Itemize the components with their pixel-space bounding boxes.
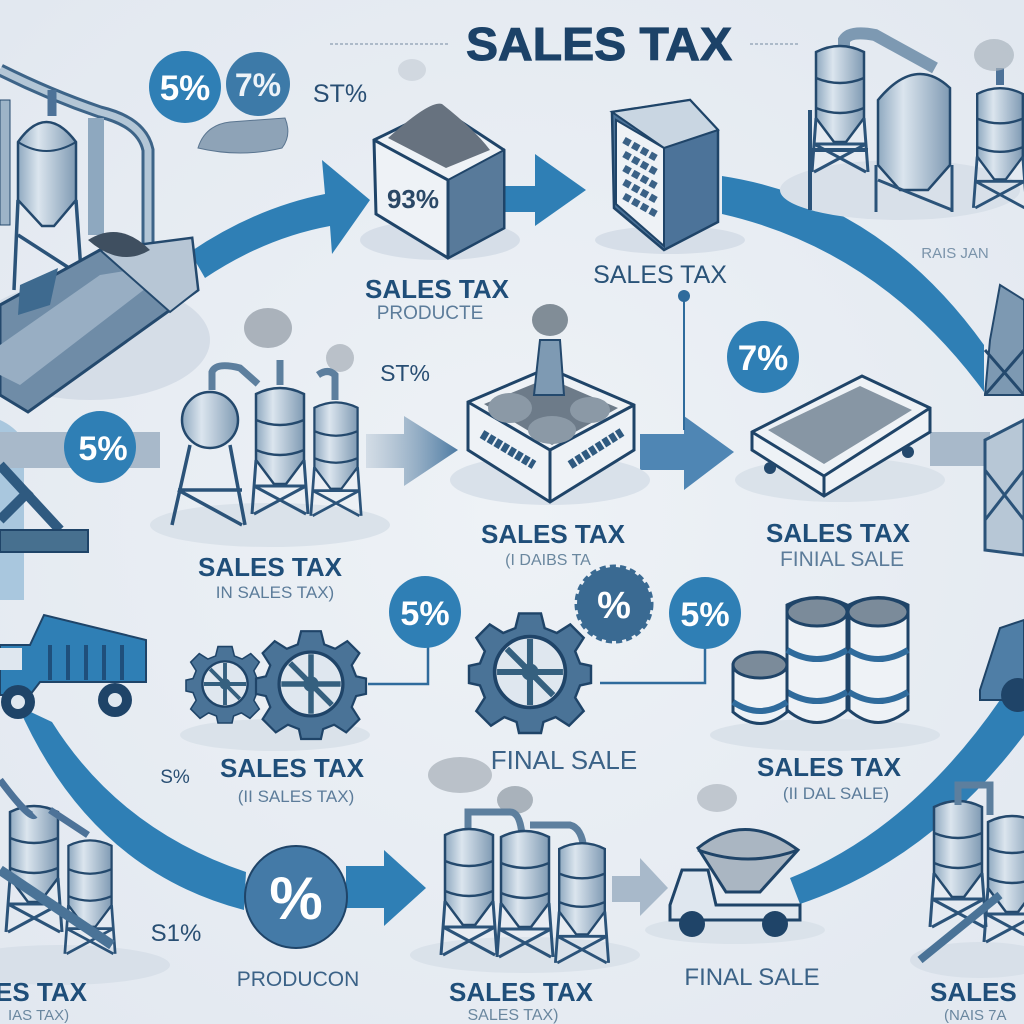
- icon: van right edge: [980, 620, 1024, 712]
- icon: dump truck left: [0, 615, 146, 719]
- arrow: bottom left sweep: [18, 706, 246, 910]
- badge: 7% middle: [727, 321, 799, 393]
- label: sales tax: SALES TAX: [593, 261, 727, 289]
- icon: gear pair: [180, 631, 370, 751]
- label: final sale bottom: FINAL SALE: [684, 964, 820, 991]
- connector: gears to 5%: [368, 640, 428, 684]
- icon: three silos: [410, 757, 640, 973]
- badge: percent: %: [269, 865, 323, 932]
- badge: 5% row 3: [389, 576, 461, 648]
- icon: top right plant: [780, 33, 1024, 220]
- label: sales tax final sale: FINIAL SALE: [780, 548, 904, 571]
- icon: center left plant row 2: [150, 308, 390, 547]
- badge: percent gear: %: [597, 585, 631, 627]
- badge: 5% left: [64, 411, 136, 483]
- icon: bottom right plant: [910, 785, 1024, 978]
- icon: conveyor left: [0, 465, 88, 552]
- label: ST% row 2: ST%: [380, 360, 430, 386]
- arrow: middle row 2: [640, 416, 734, 490]
- badge: 5% row 3 right: [669, 577, 741, 649]
- icon: barrels: [710, 598, 940, 751]
- label: sales tax bottom left: [0, 977, 88, 1024]
- arrow: bottom row 2: [612, 858, 668, 916]
- label: sales tax row 3 right: SALES TAX: [757, 752, 902, 782]
- badge: 7% top: 7%: [235, 67, 281, 103]
- arrow: top middle: [498, 154, 586, 226]
- badge: 5% row 3: 5%: [400, 595, 450, 633]
- icon: hopper truck: [645, 784, 825, 944]
- label: sales tax final sale: [766, 518, 911, 571]
- label: sales tax row 3 right: (II DAL SALE): [783, 784, 889, 803]
- label: sales tax bottom center: [449, 977, 594, 1024]
- label: sales tax center: [481, 519, 626, 569]
- label: sales tax row 3 left: SALES TAX: [220, 753, 365, 783]
- title: SALES TAX: [466, 18, 732, 70]
- badge: 5% top: 5%: [160, 69, 210, 108]
- icon: ore tray: [735, 376, 945, 502]
- label: ST% top: ST%: [313, 80, 367, 108]
- arrow: middle row 1: [366, 416, 458, 486]
- label: sales tax bottom right: (NAIS 7A: [944, 1007, 1007, 1024]
- label: final sale middle: FINAL SALE: [491, 745, 637, 775]
- label: sales tax row 2 left: [198, 552, 343, 602]
- icon: document book: [595, 100, 745, 254]
- icon: tax box: [360, 104, 520, 260]
- badge: percent gear: [577, 567, 651, 641]
- icon: right edge tower: [985, 420, 1024, 555]
- label: sales tax bottom center: SALES TAX): [468, 1007, 558, 1024]
- label: S%: S%: [160, 767, 190, 788]
- arrow: top right sweep: [722, 176, 984, 392]
- label: sales tax product: [365, 274, 510, 324]
- badge: percent: [245, 846, 347, 948]
- arrow: top left sweep: [190, 160, 370, 278]
- label: sales tax center: (I DAIBS TA: [505, 552, 591, 569]
- label: S1%: S1%: [151, 920, 201, 947]
- connector: gear to 5%: [600, 640, 705, 683]
- label: production: PRODUCON: [237, 968, 359, 991]
- label: sales tax row 3 left: (II SALES TAX): [238, 787, 354, 806]
- arrow: bottom row 1: [346, 850, 426, 926]
- icon: coins: [198, 118, 288, 153]
- connector: [678, 290, 690, 430]
- label: sales tax row 2 left: IN SALES TAX): [216, 583, 334, 602]
- badge: 5% left: 5%: [78, 430, 128, 468]
- icon: large gear: [469, 613, 591, 733]
- icon: ore bin with stack: [450, 304, 650, 505]
- label: top right: RAIS JAN: [921, 245, 989, 262]
- arrow: left descending sweep: [0, 420, 24, 600]
- label: sales tax row 3 right: [757, 752, 902, 803]
- label: sales tax bottom left: IAS TAX): [8, 1007, 69, 1024]
- icon: top left plant: [0, 70, 210, 412]
- label: sales tax bottom center: SALES TAX: [449, 977, 594, 1007]
- arrow: middle band left: [0, 432, 160, 468]
- label: sales tax product: PRODUCTE: [377, 303, 483, 324]
- badge: 5% top: [149, 51, 221, 123]
- badge: 7% top: [226, 52, 290, 116]
- label: sales tax row 2 left: SALES TAX: [198, 552, 343, 582]
- label: sales tax product: SALES TAX: [365, 274, 510, 304]
- label: sales tax center: SALES TAX: [481, 519, 626, 549]
- label: sales tax final sale: SALES TAX: [766, 518, 911, 548]
- icon: right edge plant: [985, 285, 1024, 395]
- icon: bottom left plant: [0, 780, 170, 985]
- label: sales tax bottom right: [930, 977, 1024, 1024]
- badge: 5% row 3 right: 5%: [680, 596, 730, 634]
- arrow: middle row right: [930, 432, 990, 466]
- label: sales tax row 3 left: [220, 753, 365, 806]
- icon: tax box: 93%: [387, 184, 439, 214]
- arrow: bottom right sweep: [790, 700, 1024, 904]
- badge: 7% middle: 7%: [738, 339, 788, 378]
